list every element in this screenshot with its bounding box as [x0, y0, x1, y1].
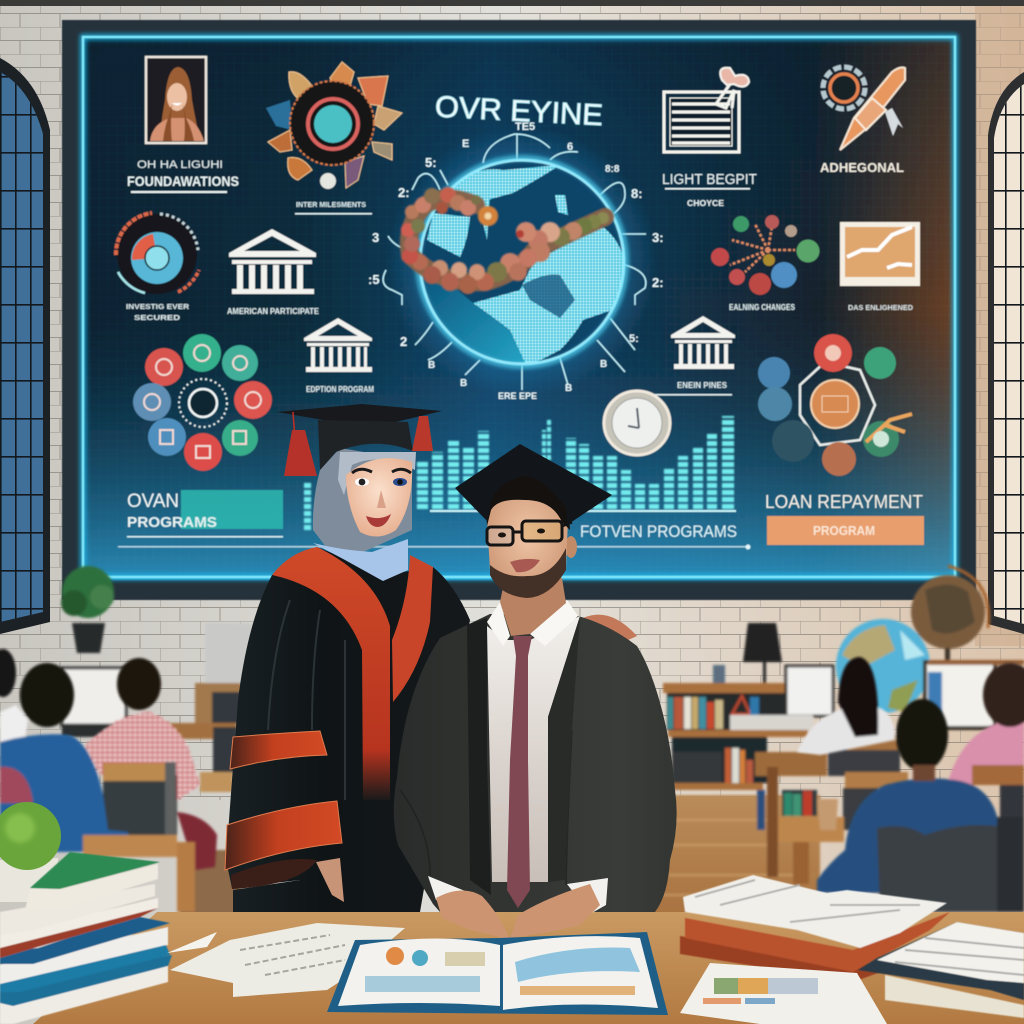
line chart caption: DAS ENLIGHENED: [848, 303, 914, 312]
globe network: [368, 121, 664, 401]
head: [487, 490, 568, 597]
blue globe: [836, 619, 930, 713]
background students right: [797, 657, 1024, 912]
gown folds: [268, 600, 345, 800]
woman graduate: [225, 404, 470, 912]
programs block left: OVAN: [127, 491, 179, 512]
blue book cover: [0, 917, 170, 964]
potted plant: [0, 802, 61, 902]
node labels: 2:: [652, 275, 664, 290]
institution 3 caption: ENEIN PINES: [677, 381, 728, 390]
left window: [0, 58, 50, 634]
globe sphere: [420, 160, 624, 364]
institution icon 3: [671, 316, 735, 369]
flower ring icon: [266, 62, 402, 189]
additional caption: ADHEGONAL: [820, 160, 904, 175]
node labels: [368, 121, 664, 401]
suit body: [394, 614, 677, 912]
inner hijab: [338, 452, 416, 495]
chart baseline: [430, 510, 736, 512]
flower garland: [401, 187, 609, 294]
badge ring right: [758, 334, 912, 476]
portrait card: [146, 57, 206, 143]
cap: [455, 444, 612, 525]
ribbon document icon: [664, 68, 749, 152]
node labels: 2: [400, 334, 407, 349]
chairs right: [877, 765, 1024, 912]
node labels: B: [565, 383, 572, 394]
wood floor: [640, 795, 820, 915]
donut caption: [126, 302, 190, 322]
node labels: B: [460, 378, 467, 389]
student plaid: [85, 658, 217, 870]
man's hands on desk: [428, 876, 608, 940]
tie: [507, 636, 532, 908]
left hand: [436, 890, 510, 940]
paper sheet: [680, 963, 887, 1024]
flower ring caption: [295, 200, 372, 214]
loan repayment block: LOAN REPAYMENT: [765, 491, 923, 512]
institution icon 1: [229, 229, 316, 294]
neck: [500, 578, 566, 636]
bookshelf: [663, 683, 808, 790]
institution 1 caption: AMERICAN PARTICIPATE: [227, 307, 320, 316]
student blue top: [0, 663, 130, 852]
eyes and brows: [352, 469, 411, 527]
green book: [30, 852, 160, 889]
book pile corner: [858, 922, 1024, 1018]
upper red book: [685, 912, 950, 972]
stole right: [392, 555, 433, 702]
node labels: B: [428, 360, 435, 371]
institution 2 caption: EDPTION PROGRAM: [306, 385, 374, 394]
programs block left: PROGRAMS: [127, 515, 217, 531]
programs label center: FOTVEN PROGRAMS: [580, 522, 737, 541]
book pile right: [680, 875, 950, 982]
student with long hair: [797, 657, 895, 755]
background students left: [0, 649, 217, 912]
bar chart center right: [542, 416, 734, 510]
left cuff: [428, 876, 475, 905]
connector lines: [383, 134, 646, 390]
portrait caption: FOUNDAWATIONS: [127, 174, 239, 189]
hair: [486, 463, 570, 530]
screen surface: [83, 37, 955, 580]
node labels: TE5: [515, 121, 535, 133]
document caption: CHOYCE: [687, 198, 724, 208]
lapel left: [467, 618, 491, 895]
gown body: [226, 547, 470, 912]
collar: [487, 600, 578, 646]
table: [83, 835, 195, 912]
sleeve band lower: [225, 801, 342, 870]
donut caption: SECURED: [134, 315, 180, 322]
glasses: [487, 521, 572, 545]
node labels: 3:: [652, 230, 664, 245]
node labels: :5: [368, 272, 380, 287]
second book: [0, 884, 155, 935]
scarf: [313, 539, 408, 581]
node labels: E: [462, 138, 469, 150]
right window: [975, 6, 1024, 646]
chair: [103, 762, 177, 837]
student at edge: [0, 649, 28, 745]
papers on desk: [167, 923, 405, 997]
hijab: [313, 448, 412, 558]
stole left: [272, 547, 390, 800]
node labels: 6: [567, 141, 573, 153]
node labels: 5:: [629, 333, 639, 345]
node labels: 8:: [631, 186, 643, 201]
classroom background: [61, 566, 1024, 915]
lower red book: [680, 936, 900, 982]
document caption: [662, 172, 757, 208]
node labels: ERE EPE: [498, 391, 537, 401]
face: [346, 458, 412, 537]
open brochure: [327, 932, 668, 1015]
hanging plant: [61, 566, 114, 653]
right cuff: [567, 878, 608, 914]
node labels: 5:: [425, 155, 437, 170]
line chart card: [840, 222, 920, 286]
shirt: [487, 616, 580, 882]
right hand: [510, 884, 600, 938]
title: OVR EYINE: [434, 91, 604, 132]
tables and shelves right: [755, 735, 908, 884]
sleeve band upper: [230, 731, 327, 769]
document caption: LIGHT BEGPIT: [662, 172, 757, 188]
lapel right: [548, 616, 580, 882]
wooden desk: [33, 912, 1024, 1024]
display screen: [62, 20, 976, 600]
institution icon 2: [304, 318, 372, 372]
donut chart: [116, 213, 199, 294]
molecule caption: EALNING CHANGES: [729, 303, 796, 312]
node labels: 8:8: [605, 164, 620, 175]
hand: [316, 858, 344, 902]
donut caption: INVESTIG EVER: [126, 302, 190, 311]
ear: [565, 536, 577, 558]
blue cover: [0, 955, 172, 1006]
cap: [277, 404, 442, 476]
programs label center: [118, 522, 750, 550]
student pink top: [947, 663, 1024, 785]
book stack left: [0, 852, 172, 1024]
sleeve lining: [231, 859, 317, 889]
screen frame: [62, 20, 976, 600]
neon screen border: [83, 37, 955, 577]
man graduate: [394, 444, 677, 912]
node labels: B: [600, 359, 607, 370]
right monitors: [730, 660, 1024, 730]
loan repayment block: PROGRAM: [813, 523, 875, 538]
loan repayment block: [765, 491, 924, 545]
blue book pages: [0, 927, 168, 984]
hand on shoulder: [583, 615, 637, 640]
student blue shirt: [817, 699, 998, 893]
portrait caption: OH HA LIGUHI: [137, 159, 223, 171]
bar chart center left: [304, 431, 489, 531]
globe glow: [387, 127, 657, 397]
beard: [490, 548, 566, 598]
institution 3 caption: [642, 381, 732, 396]
programs block left: [127, 490, 283, 538]
left alcove furniture: [62, 623, 252, 792]
node labels: 2:: [398, 185, 410, 200]
portrait caption: [127, 159, 239, 193]
brown globe: [911, 566, 989, 662]
clock icon: [604, 391, 670, 455]
red book: [0, 898, 158, 952]
flower ring caption: INTER MILESMENTS: [296, 200, 366, 209]
arm seams: [400, 730, 572, 885]
badge ring left: [133, 334, 272, 471]
eyes and mouth: [498, 528, 545, 572]
bottom book: [0, 965, 168, 1024]
white pages: [683, 875, 947, 948]
pencil cup: [713, 665, 725, 684]
desk lamp: [743, 623, 782, 687]
node labels: 3: [372, 230, 379, 245]
gear and pen icon: [823, 67, 905, 150]
molecule icon: [711, 215, 820, 295]
left floor: [180, 850, 240, 915]
